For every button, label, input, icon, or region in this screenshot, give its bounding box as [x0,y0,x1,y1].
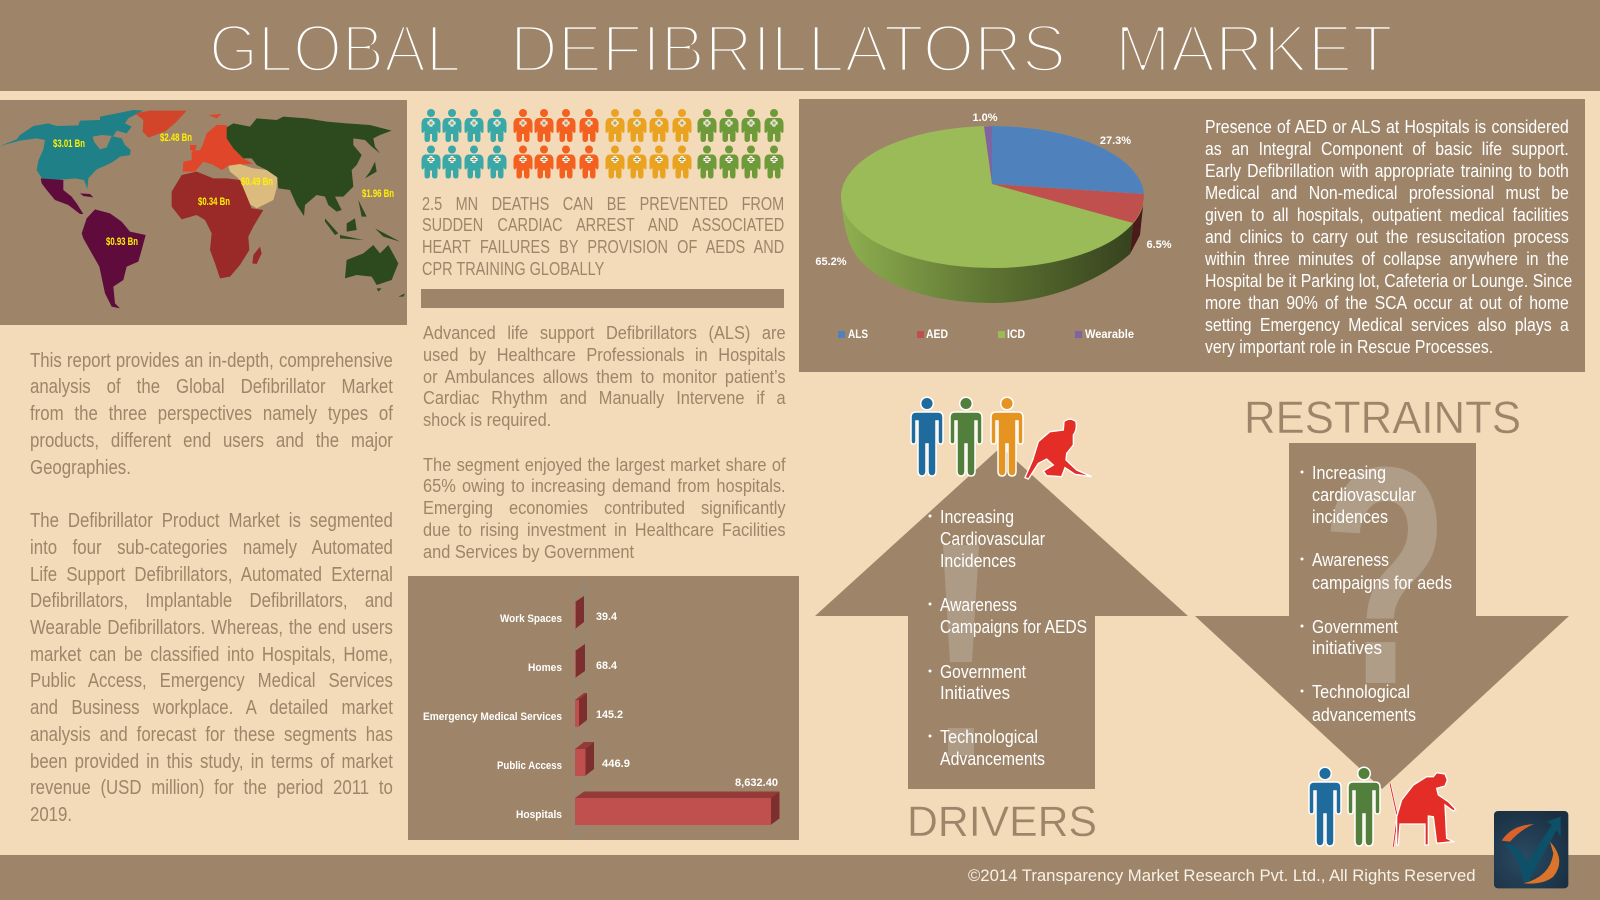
driver: awareness campaigns: Campaigns for AEDS [940,616,1087,637]
restraint list [1300,462,1452,725]
map value labels: $0.93 Bn [106,236,138,248]
map value labels [53,132,394,248]
driver: cardiovascular incidences: Increasing [940,506,1014,527]
text block: product segmentation: The Defibrillator Product Market is segmented [30,510,393,532]
bar labels: Homes [528,662,562,674]
restraint: technological advancements [1300,681,1416,725]
text block: AED and ALS at hospitals: Early Defibrillation with appropriate training to both [1205,160,1569,181]
text block: AED and ALS at hospitals: Medical and Non-medical professional must be [1205,182,1569,203]
bar labels: Public Access [497,760,562,772]
text block: product segmentation: Public Access, Emergency Medical Services [30,670,393,692]
text block: advanced life support: used by Healthcare Professionals in Hospitals [422,344,785,365]
pie percentage labels: 65.2% [815,256,847,268]
text block: segment share: due to rising investment in Healthcare Facilities [422,519,785,540]
pie legend: ICD [1007,329,1025,341]
text block: AED and ALS at hospitals: very important role in Rescue Processes. [1205,336,1493,357]
panel: world map [0,100,407,325]
restraint: awareness campaigns: Awareness [1312,549,1389,570]
region: Greenland and Europe [135,111,253,172]
copyright: ©2014 Transparency Market Research Pvt. Ltd., All Rights Reserved [968,866,1476,885]
bar labels: Hospitals [516,809,562,821]
pie percentage labels: 27.3% [1100,135,1131,147]
map value labels: $1.96 Bn [362,188,394,200]
divider bar [421,289,784,308]
pie legend: ALS [848,329,868,341]
text block: deaths preventable callout [422,194,784,279]
question mark watermark: ? [1321,402,1449,749]
driver: government initiatives: Government [940,661,1026,682]
bar values [596,611,778,789]
logo [1494,811,1568,888]
header band [0,0,1600,91]
restraint: cardiovascular incidences: Increasing [1312,462,1386,483]
driver: technological advancements: Technological [940,726,1038,747]
icon: seated elderly person [1390,773,1456,847]
driver: technological advancements [928,726,1045,769]
slice: ICD 65.2% [841,126,1144,268]
bar values: 446.9 [602,758,630,770]
text block: advanced life support: shock is required. [422,409,551,430]
bar: work spaces [575,596,584,629]
text block: advanced life support: or Ambulances allows them to monitor patient’s [422,366,785,387]
heading: drivers: DRIVERS [907,798,1097,846]
map value labels: $3.01 Bn [53,138,85,150]
map value labels: $0.49 Bn [241,176,273,188]
icons: two standing people [1309,767,1380,846]
text block: segment share: 65% owing to increasing demand from hospitals. [422,475,785,496]
title: MARKET [1115,12,1393,86]
text block: deaths preventable callout: SUDDEN CARDIAC ARREST AND ASSOCIATED [422,215,784,235]
text block: product segmentation [30,510,393,826]
people: amber group [606,109,692,178]
map value labels: $2.48 Bn [160,132,192,144]
text block: AED and ALS at hospitals: setting Emergency Medical services also plays a [1205,314,1569,335]
bar values: 68.4 [596,660,618,672]
text block: AED and ALS at hospitals: given to all hospitals, outpatient medical facilities [1205,204,1569,225]
driver: government initiatives: Initiatives [940,682,1010,703]
text block: segment share: The segment enjoyed the largest market share of [422,454,785,474]
map value labels: $0.34 Bn [198,196,230,208]
text block: AED and ALS at hospitals: as an Integral Component of basic life support. [1205,138,1569,159]
title [209,12,1393,86]
bar values: 145.2 [596,709,623,721]
bar: hospitals [575,792,780,825]
slice: AED 6.5% [992,184,1144,223]
text block: segment share: and Services by Government [422,541,634,562]
text block: product segmentation: Wearable Defibrillators. Whereas, the end users [30,617,393,639]
region: Middle East [228,164,277,208]
text block: AED and ALS at hospitals [1205,116,1572,357]
restraint: awareness campaigns: campaigns for aeds [1312,572,1452,593]
text block: product segmentation: into four sub-categories namely Automated [30,537,393,559]
text block: segment share [422,454,786,562]
driver: awareness campaigns [928,594,1087,637]
text block: report overview: Geographies. [30,456,131,478]
text block: advanced life support: Advanced life support Defibrillators (ALS) are [422,322,785,343]
text block: deaths preventable callout: 2.5 MN DEATHS CAN BE PREVENTED FROM [422,194,784,214]
pie percentage labels [815,112,1172,268]
text block: advanced life support: Cardiac Rhythm and Manually Intervene if a [422,387,785,408]
pie percentage labels: 6.5% [1146,239,1172,251]
map regions [0,110,405,308]
bar values: 8,632.40 [735,777,778,789]
title: DEFIBRILLATORS [510,12,1066,86]
text block: AED and ALS at hospitals: Presence of AED or ALS at Hospitals is considered [1205,116,1569,136]
restraint: government initiatives: Government [1312,616,1398,637]
driver: cardiovascular incidences [928,506,1045,571]
people: orange group [514,109,598,178]
pie chart [815,112,1172,341]
pie legend: Wearable [1085,329,1134,341]
pie side wall [841,197,1144,303]
restraint: technological advancements: Technological [1312,681,1410,702]
text block: deaths preventable callout: CPR TRAINING GLOBALLY [422,259,604,279]
restraint: cardiovascular incidences: incidences [1312,506,1388,527]
driver: technological advancements: Advancements [940,748,1045,769]
arrow: down [1195,443,1569,789]
text block: AED and ALS at hospitals: and clinics to carry out the resuscitation process [1205,226,1569,247]
text block: product segmentation: and Business workplace. A detailed market [30,697,393,719]
bar values: 39.4 [596,611,618,623]
text block: product segmentation: market can be classified into Hospitals, Home, [30,644,393,666]
title: GLOBAL [209,12,461,86]
arrow: up [815,447,1188,789]
pie legend [838,329,1134,341]
exclamation mark watermark [943,545,979,756]
panel: product share pie and text [799,99,1585,372]
pie percentage labels: 1.0% [972,112,998,124]
text block: advanced life support [422,322,786,430]
people: teal group [422,109,506,178]
pie legend: AED [926,329,948,341]
region: Latin America [41,178,146,308]
bar: homes [575,644,585,678]
text block: segment share: Emerging economies contributed significantly [422,497,785,518]
region: Africa [172,172,263,278]
pictogram: rows of people [422,109,784,178]
bar labels [423,613,562,821]
icons: three standing people [911,397,1023,476]
driver: awareness campaigns: Awareness [940,594,1017,615]
bar labels: Emergency Medical Services [423,711,562,723]
driver: cardiovascular incidences: Cardiovascular [940,528,1045,549]
text block: product segmentation: revenue (USD million) for the period 2011 to [30,777,393,799]
text block: product segmentation: Life Support Defibrillators, Automated External [30,564,393,586]
text block: report overview [30,350,393,478]
restraint: cardiovascular incidences [1300,462,1416,527]
driver: government initiatives [928,661,1026,703]
text block: deaths preventable callout: HEART FAILURES BY PROVISION OF AEDS AND [422,237,784,257]
people: green group [698,109,784,178]
panel: restraints [1195,395,1569,847]
bar: emergency medical services [575,693,587,727]
restraint: awareness campaigns [1300,549,1452,593]
text block: report overview: from the three perspectives namely types of [30,403,393,425]
text block: product segmentation: analysis and forecast for these segments has [30,724,393,746]
text block: product segmentation: 2019. [30,804,72,826]
bar labels: Work Spaces [500,613,562,625]
region: North America [0,110,143,189]
restraint: cardiovascular incidences: cardiovascular [1312,484,1416,505]
text block: report overview: This report provides an in-depth, comprehensive [30,350,393,372]
restraint: government initiatives [1300,616,1398,658]
text block: product segmentation: been provided in this study, in terms of market [30,751,393,773]
text block: report overview: products, different end users and the major [30,430,393,452]
text block: AED and ALS at hospitals: within three minutes of collapse anywhere in the [1205,248,1569,269]
panel: end user bar chart [408,576,799,840]
panel: drivers [815,396,1188,846]
restraint: technological advancements: advancements [1312,704,1416,725]
bar: public access [575,742,594,776]
icon: red sprinter [1025,419,1092,479]
slice: ALS 27.3% [992,126,1144,194]
driver list [928,506,1087,769]
slice: Wearable 1.0% [984,126,992,184]
footer band [0,855,1600,900]
driver: cardiovascular incidences: Incidences [940,550,1016,571]
text block: AED and ALS at hospitals: Hospital be it Parking lot, Cafeteria or Lounge. Since [1205,270,1572,291]
restraint: government initiatives: initiatives [1312,637,1382,658]
text block: product segmentation: Defibrillators, Implantable Defibrillators, and [30,590,393,612]
region: Asia Pacific [227,117,405,297]
text block: AED and ALS at hospitals: more than 90% of the SCA occur at out of home [1205,292,1569,313]
text block: report overview: analysis of the Global Defibrillator Market [30,376,393,398]
